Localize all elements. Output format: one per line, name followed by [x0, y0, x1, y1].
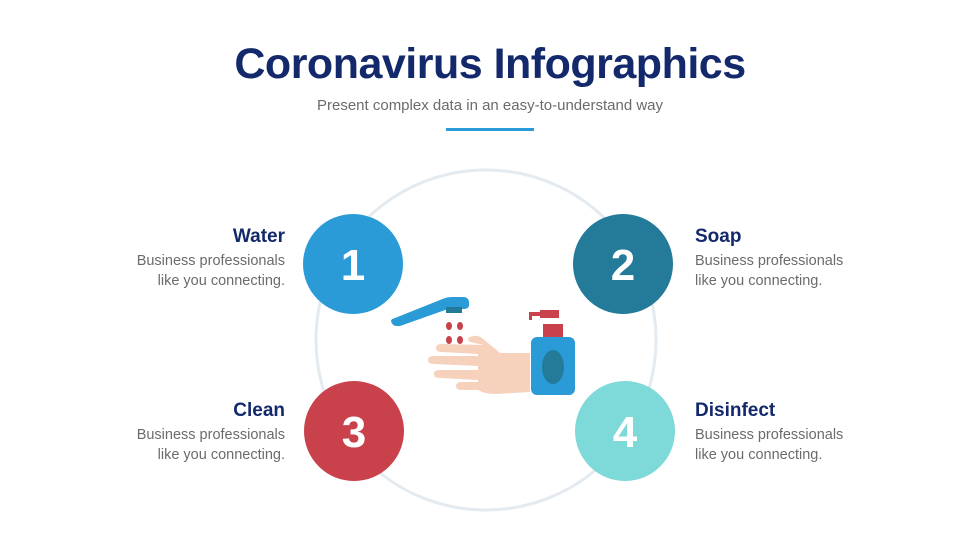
circle 2: 2: [611, 241, 635, 290]
circle 1: 1: [341, 241, 365, 290]
text block: clean: Clean: [233, 400, 285, 421]
text block: water: like you connecting.: [158, 273, 285, 289]
circle 1: [303, 214, 403, 314]
circle 3: 3: [342, 408, 366, 457]
text block: disinfect: [695, 400, 843, 463]
text block: soap: Business professionals: [695, 253, 843, 269]
circle 2: [573, 214, 673, 314]
text block: water: Water: [233, 226, 285, 247]
circle 3: [304, 381, 404, 481]
text block: soap: like you connecting.: [695, 273, 822, 289]
text block: water: [137, 226, 285, 289]
icon: soap bottle: [529, 310, 575, 395]
icon: hand: [428, 336, 530, 394]
text block: water: Business professionals: [137, 253, 285, 269]
subtitle: Present complex data in an easy-to-understand way: [317, 97, 663, 114]
text block: disinfect: Business professionals: [695, 427, 843, 443]
text block: disinfect: Disinfect: [695, 400, 775, 421]
text block: clean: [137, 400, 285, 463]
text block: soap: [695, 226, 843, 289]
circle 4: [575, 381, 675, 481]
title: Coronavirus Infographics: [234, 40, 746, 88]
icon: water drops: [446, 322, 463, 344]
text block: clean: like you connecting.: [158, 447, 285, 463]
text block: disinfect: like you connecting.: [695, 447, 822, 463]
icon: faucet: [391, 297, 469, 326]
underline accent: [446, 128, 534, 131]
text block: clean: Business professionals: [137, 427, 285, 443]
text block: soap: Soap: [695, 226, 741, 247]
circle 4: 4: [613, 408, 638, 457]
